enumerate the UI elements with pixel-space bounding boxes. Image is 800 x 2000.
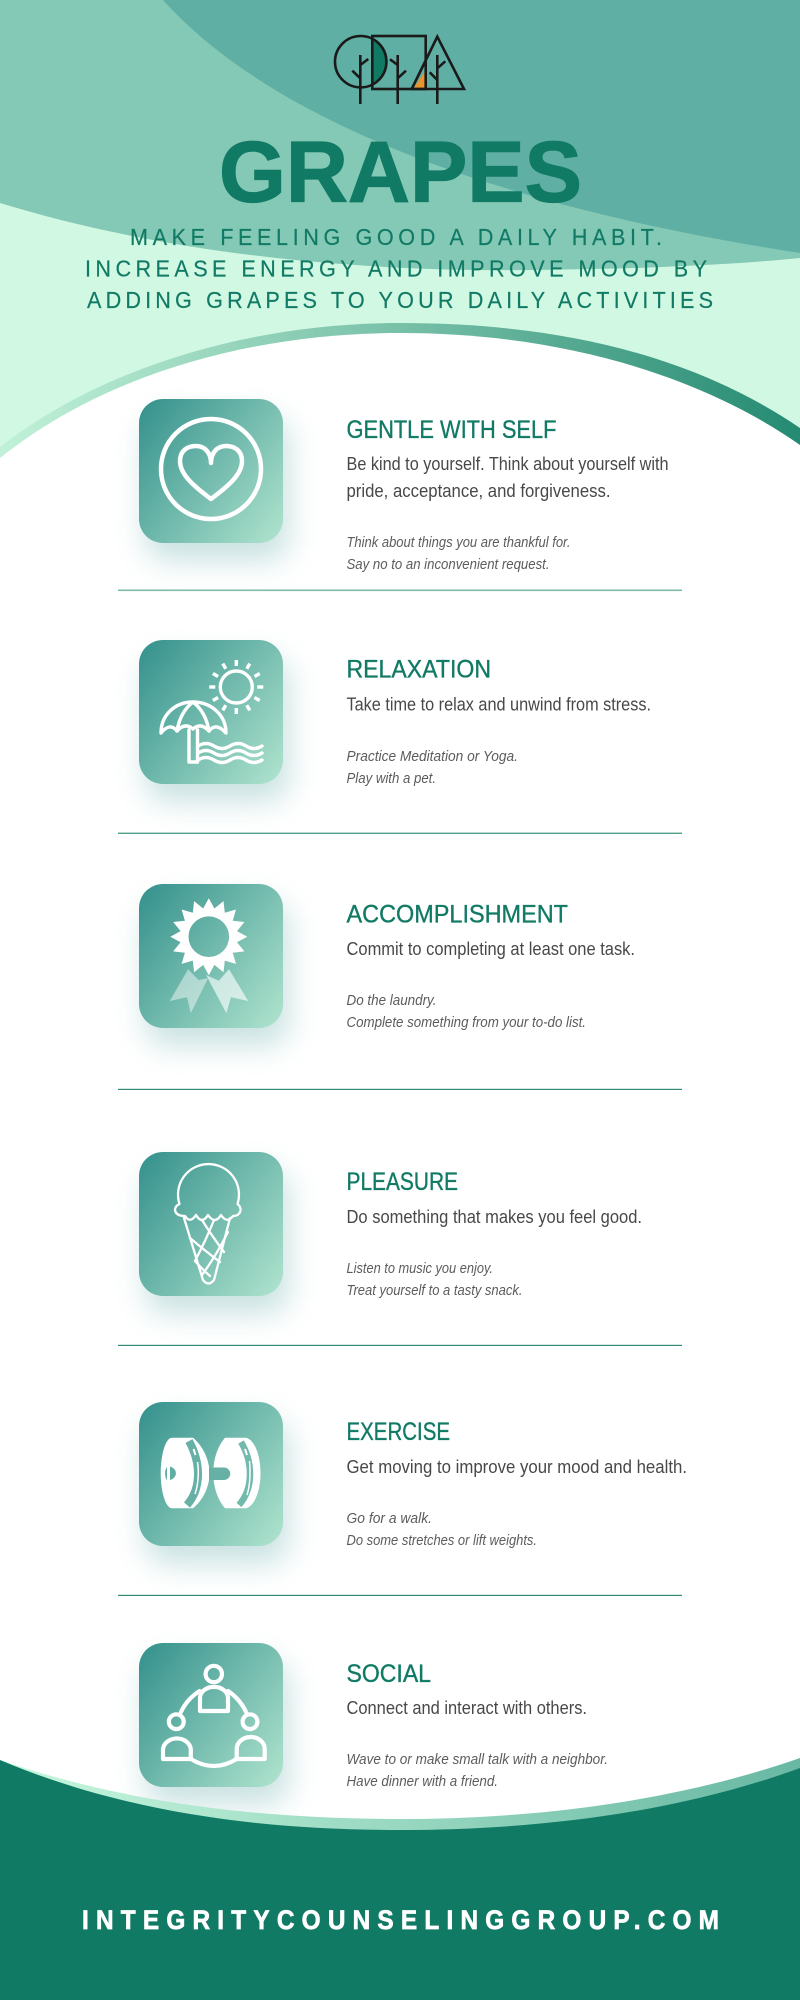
icon: dumbbell xyxy=(161,1438,260,1508)
white content panel xyxy=(0,333,800,1900)
icon: ice cream cone xyxy=(175,1164,241,1284)
panel: social: SOCIAL xyxy=(346,1660,431,1688)
panel: gentle with self: GENTLE WITH SELF xyxy=(346,416,556,444)
panel: gentle with self: Say no to an inconvenient request. xyxy=(346,557,550,573)
footer background xyxy=(0,1760,800,2000)
panel: pleasure: Do something that makes you feel good. xyxy=(346,1207,642,1227)
panel: gentle with self: Think about things you are thankful for. xyxy=(346,535,570,551)
header wave: dark teal xyxy=(163,0,800,253)
title: GRAPES xyxy=(219,124,582,220)
panel: relaxation: Play with a pet. xyxy=(346,771,436,787)
panel: gentle with self xyxy=(139,399,668,573)
icon: beach umbrella, sun and waves xyxy=(161,660,263,762)
panel: gentle with self: pride, acceptance, and forgiveness. xyxy=(346,481,610,501)
panel: relaxation: Take time to relax and unwind from stress. xyxy=(346,695,651,715)
icon: heart in circle xyxy=(161,419,261,519)
panel: exercise xyxy=(139,1402,687,1564)
subtitle: INCREASE ENERGY AND IMPROVE MOOD BY xyxy=(85,256,707,282)
subtitle xyxy=(85,224,713,313)
panel: pleasure xyxy=(139,1152,642,1314)
bottom arc band xyxy=(0,1758,800,2000)
panel: pleasure: Treat yourself to a tasty snack. xyxy=(346,1283,522,1299)
icon: award rosette xyxy=(170,898,248,1013)
panel: accomplishment: Complete something from your to-do list. xyxy=(346,1015,586,1031)
panel: relaxation xyxy=(139,640,651,802)
panel: exercise: EXERCISE xyxy=(346,1418,450,1446)
panel: accomplishment: Commit to completing at least one task. xyxy=(346,939,635,959)
panel: pleasure: Listen to music you enjoy. xyxy=(346,1261,493,1277)
panel: social: Connect and interact with others. xyxy=(346,1698,587,1718)
panel: accomplishment xyxy=(139,884,635,1046)
panel: pleasure: PLEASURE xyxy=(346,1168,458,1196)
top arc band xyxy=(0,323,800,1000)
panel: relaxation: Practice Meditation or Yoga. xyxy=(346,749,518,765)
panel: social: Wave to or make small talk with a neighbor. xyxy=(346,1752,608,1768)
panel: social xyxy=(0,1643,800,2000)
panel: exercise: Go for a walk. xyxy=(346,1511,432,1527)
subtitle: MAKE FEELING GOOD A DAILY HABIT. xyxy=(130,224,662,250)
footer url: INTEGRITYCOUNSELINGGROUP.COM xyxy=(82,1906,719,1935)
header wave: mid green xyxy=(0,0,800,270)
panel: social: Have dinner with a friend. xyxy=(346,1774,498,1790)
logo xyxy=(335,36,464,104)
panel: relaxation: RELAXATION xyxy=(346,656,491,684)
panel: exercise: Do some stretches or lift weights. xyxy=(346,1533,537,1549)
panel: gentle with self: Be kind to yourself. Think about yourself with xyxy=(346,454,668,474)
icon: connected people xyxy=(163,1666,265,1766)
panel: accomplishment: ACCOMPLISHMENT xyxy=(346,901,568,929)
panel: accomplishment: Do the laundry. xyxy=(346,993,436,1009)
subtitle: ADDING GRAPES TO YOUR DAILY ACTIVITIES xyxy=(87,287,713,313)
panel: exercise: Get moving to improve your mood and health. xyxy=(346,1457,687,1477)
